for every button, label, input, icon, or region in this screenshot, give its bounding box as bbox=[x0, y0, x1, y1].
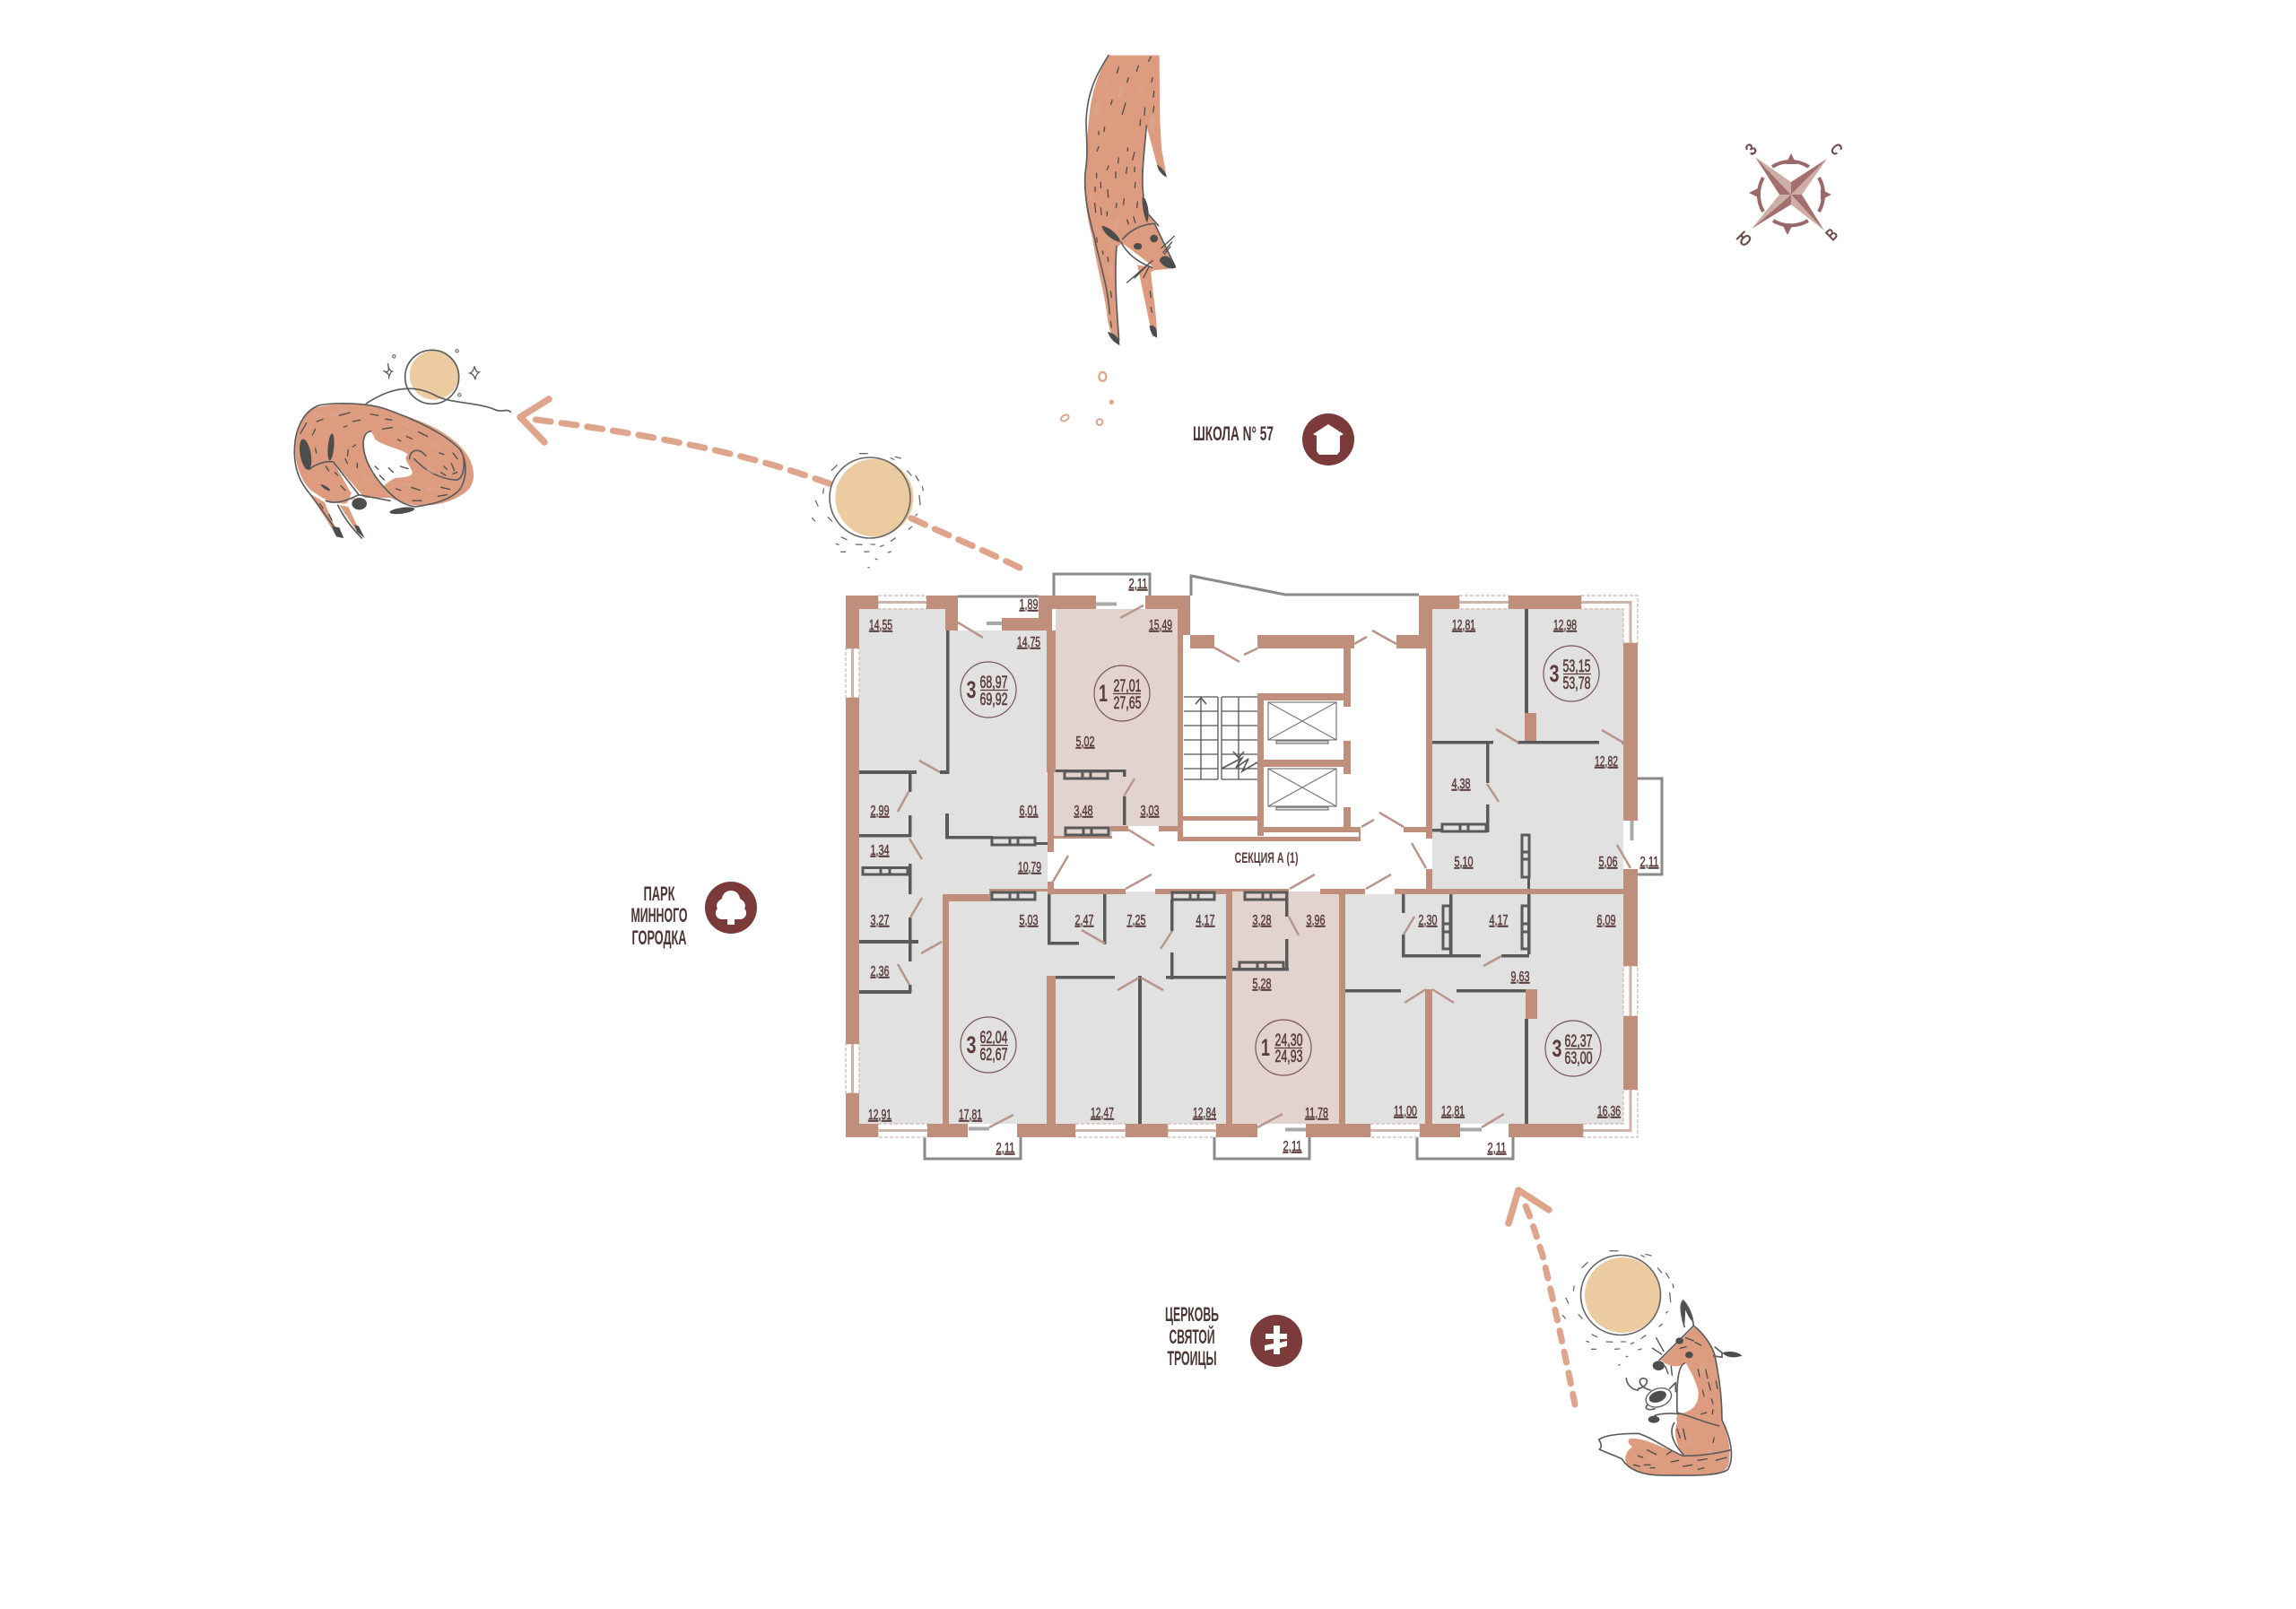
area 2,30: 2,30 bbox=[1419, 913, 1438, 928]
apartment badge: 3 rooms 53,15 / 53,78: 53,15 bbox=[1562, 657, 1591, 676]
elevator shafts bbox=[1268, 702, 1336, 810]
compass rose bbox=[1732, 140, 1846, 251]
area 12,82: 12,82 bbox=[1595, 754, 1618, 770]
illustration: sleeping fox with moon bbox=[294, 350, 510, 538]
balconies and corridor outline bbox=[925, 574, 1662, 1159]
staircase bbox=[1184, 697, 1257, 779]
area 3,96: 3,96 bbox=[1306, 913, 1326, 928]
area 2,36: 2,36 bbox=[870, 964, 890, 979]
area 3,28: 3,28 bbox=[1252, 913, 1272, 928]
area 3,27: 3,27 bbox=[870, 913, 890, 928]
apartment badge: 1 room 24,30 / 24,93: 1 bbox=[1261, 1034, 1270, 1061]
area 6,09: 6,09 bbox=[1596, 913, 1616, 928]
apartment badge: 1 room 27,01 / 27,65: 27,01 bbox=[1114, 677, 1141, 696]
apartment badge: 3 rooms 53,15 / 53,78: 53,78 bbox=[1562, 674, 1591, 693]
compass letters: В bbox=[1822, 225, 1842, 245]
icon: tree bbox=[705, 882, 757, 934]
area 12,47: 12,47 bbox=[1091, 1106, 1114, 1121]
church label bbox=[1165, 1303, 1219, 1370]
area 7,25: 7,25 bbox=[1126, 913, 1146, 928]
icon: school house bbox=[1302, 413, 1354, 465]
apartment badge: 3 rooms 68,97 / 69,92: 69,92 bbox=[979, 691, 1008, 709]
compass star bbox=[1752, 157, 1827, 230]
area 12,81 lower: 12,81 bbox=[1441, 1104, 1465, 1119]
park label bbox=[631, 883, 687, 949]
landmark: park bbox=[631, 882, 757, 949]
sun near sitting fox bbox=[1562, 1251, 1674, 1365]
door swings bbox=[898, 605, 1631, 1127]
area 10,79: 10,79 bbox=[1018, 860, 1041, 875]
area 2,47: 2,47 bbox=[1074, 913, 1094, 928]
church label: СВЯТОЙ bbox=[1170, 1326, 1214, 1348]
landmark: church bbox=[1165, 1303, 1302, 1370]
area 4,17 right: 4,17 bbox=[1489, 913, 1509, 928]
apartment badge: 1 room 27,01 / 27,65: 27,65 bbox=[1114, 694, 1141, 713]
area 2,11 lower middle balcony: 2,11 bbox=[1283, 1139, 1302, 1154]
apartment badge: 3 rooms 62,04 / 62,67: 3 bbox=[967, 1031, 976, 1058]
apartment badge: 3 rooms 68,97 / 69,92: 3 bbox=[967, 676, 976, 703]
apartment badge: 3 rooms 68,97 / 69,92: 68,97 bbox=[979, 674, 1008, 692]
apartment badge: 3 rooms 62,37 / 63,00: 3 bbox=[1552, 1035, 1562, 1062]
interior partitions bbox=[859, 609, 1623, 1124]
sun on the arrow bbox=[813, 454, 923, 568]
illustration: fox with coffee cup bbox=[1599, 1300, 1742, 1476]
apartment badge: 1 room 27,01 / 27,65: 1 bbox=[1099, 680, 1108, 707]
compass letters: С bbox=[1826, 140, 1846, 160]
area 14,75: 14,75 bbox=[1017, 635, 1040, 650]
ventilation ducts bbox=[863, 771, 1529, 970]
area 2,11 lower right balcony: 2,11 bbox=[1487, 1141, 1507, 1156]
area 5,28: 5,28 bbox=[1252, 977, 1272, 992]
windows bbox=[846, 596, 1638, 1137]
park label: ПАРК bbox=[644, 883, 675, 905]
area 11,78: 11,78 bbox=[1305, 1106, 1328, 1121]
area 12,91: 12,91 bbox=[868, 1108, 891, 1123]
illustration: fox falling from the top bbox=[1060, 56, 1176, 425]
apartment badge: 3 rooms 68,97 / 69,92 bbox=[961, 662, 1016, 718]
area 2,11 top balcony: 2,11 bbox=[1128, 577, 1148, 592]
area 1,34: 1,34 bbox=[870, 843, 890, 858]
church label: ТРОИЦЫ bbox=[1168, 1347, 1216, 1370]
landmark: school bbox=[1193, 413, 1354, 465]
area 17,81: 17,81 bbox=[959, 1108, 982, 1123]
church label: ЦЕРКОВЬ bbox=[1165, 1303, 1219, 1326]
apartment floors bbox=[859, 609, 1623, 1124]
apartment badge: 3 rooms 53,15 / 53,78: 3 bbox=[1550, 660, 1559, 687]
floor plan bbox=[846, 574, 1662, 1159]
apartment badge: 1 room 24,30 / 24,93: 24,93 bbox=[1275, 1048, 1302, 1066]
school label: ШКОЛА N° 57 bbox=[1193, 422, 1274, 445]
compass letters: Ю bbox=[1732, 228, 1755, 251]
area 5,06: 5,06 bbox=[1598, 855, 1618, 870]
area 4,17: 4,17 bbox=[1196, 913, 1214, 928]
apartment badge: 3 rooms 62,37 / 63,00: 63,00 bbox=[1564, 1049, 1593, 1068]
apartment badge: 3 rooms 62,04 / 62,67: 62,04 bbox=[979, 1029, 1008, 1048]
area 5,02: 5,02 bbox=[1076, 735, 1094, 750]
compass ticks bbox=[1749, 153, 1831, 235]
section title: СЕКЦИЯ А (1) bbox=[1234, 849, 1299, 866]
area 4,38: 4,38 bbox=[1451, 777, 1471, 792]
area 16,36: 16,36 bbox=[1597, 1104, 1621, 1119]
area 5,10: 5,10 bbox=[1455, 855, 1474, 870]
area 14,55: 14,55 bbox=[869, 618, 892, 633]
apartment badge: 3 rooms 62,04 / 62,67: 62,67 bbox=[979, 1046, 1008, 1065]
compass letters: З bbox=[1742, 140, 1761, 160]
area 3,03: 3,03 bbox=[1141, 804, 1159, 819]
area 2,99: 2,99 bbox=[870, 804, 890, 819]
apartment badge: 1 room 24,30 / 24,93 bbox=[1256, 1020, 1311, 1075]
area 5,03: 5,03 bbox=[1019, 913, 1039, 928]
area 1,89: 1,89 bbox=[1019, 597, 1039, 613]
brick walls bbox=[846, 596, 1638, 1137]
area 2,11 lower left balcony: 2,11 bbox=[996, 1141, 1015, 1156]
apartment badge: 1 room 24,30 / 24,93: 24,30 bbox=[1275, 1031, 1302, 1050]
area 2,11 right balcony: 2,11 bbox=[1639, 855, 1659, 870]
area 3,48: 3,48 bbox=[1074, 804, 1092, 819]
area 11,00: 11,00 bbox=[1394, 1104, 1417, 1119]
apartment badge: 3 rooms 62,37 / 63,00: 62,37 bbox=[1564, 1032, 1593, 1051]
icon: orthodox cross bbox=[1250, 1315, 1302, 1367]
apartment badge: 3 rooms 53,15 / 53,78 bbox=[1544, 646, 1599, 701]
arrow: sun path to sleeping fox bbox=[520, 399, 1020, 568]
area 9,63: 9,63 bbox=[1510, 970, 1530, 985]
apartment badge: 1 room 27,01 / 27,65 bbox=[1094, 665, 1150, 721]
fox body bbox=[294, 404, 474, 538]
park label: МИННОГО bbox=[631, 904, 687, 926]
area 12,84: 12,84 bbox=[1193, 1106, 1216, 1121]
area 12,98: 12,98 bbox=[1553, 618, 1577, 633]
apartment badge: 3 rooms 62,04 / 62,67 bbox=[961, 1017, 1016, 1073]
area 12,81 upper: 12,81 bbox=[1452, 618, 1475, 633]
moon bbox=[366, 350, 510, 412]
apartment badge: 3 rooms 62,37 / 63,00 bbox=[1545, 1021, 1601, 1076]
area 15,49: 15,49 bbox=[1149, 618, 1172, 633]
compass ring bbox=[1759, 161, 1823, 225]
room area labels bbox=[868, 577, 1659, 1156]
compass letters bbox=[1732, 140, 1846, 251]
park label: ГОРОДКА bbox=[631, 926, 687, 949]
arrow: sun path from sitting fox bbox=[1509, 1190, 1575, 1405]
area 6,01: 6,01 bbox=[1019, 804, 1039, 819]
